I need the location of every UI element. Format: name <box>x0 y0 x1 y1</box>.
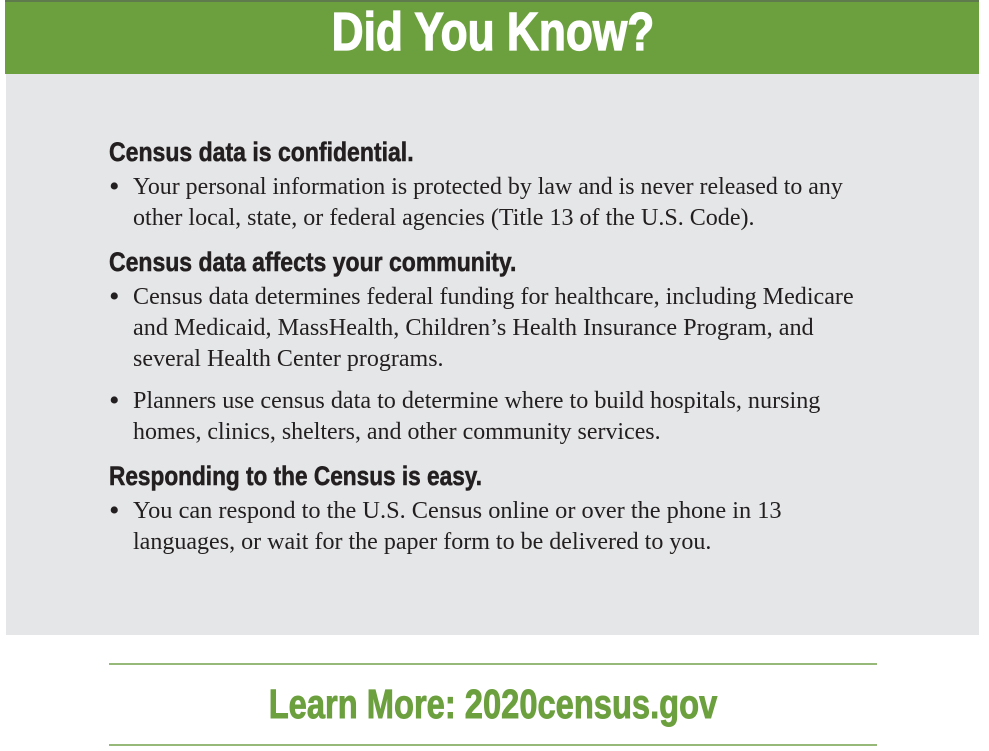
panel: facts <box>6 74 979 635</box>
heading: easy: Responding to the Census is easy. <box>109 460 482 490</box>
heading: confidential: Census data is confidential. <box>109 136 414 166</box>
bullet: • <box>109 384 120 417</box>
text: planners: Planners use census data to determine where to build hospitals, nursing <box>133 387 820 414</box>
bullet: • <box>109 494 120 527</box>
text: responding: languages, or wait for the paper form to be delivered to you. <box>133 528 711 555</box>
text: confidentiality: Your personal information is protected by law and is never released to any <box>133 173 843 200</box>
text: responding: You can respond to the U.S. Census online or over the phone in 13 <box>133 497 782 524</box>
bullet: • <box>109 280 120 313</box>
text: responding <box>133 497 782 555</box>
title: Did You Know? <box>332 2 654 62</box>
text: confidentiality <box>133 173 843 231</box>
text: funding: several Health Center programs. <box>133 345 444 372</box>
bullet: • <box>109 170 120 203</box>
footer link: Learn More: 2020census.gov <box>269 680 717 726</box>
text: funding: Census data determines federal funding for healthcare, including Medicare <box>133 283 854 310</box>
title banner <box>5 0 979 74</box>
heading: community: Census data affects your community. <box>109 246 516 276</box>
text: confidentiality: other local, state, or federal agencies (Title 13 of the U.S. Code). <box>133 204 755 231</box>
text: funding: and Medicaid, MassHealth, Children’s Health Insurance Program, and <box>133 314 814 341</box>
text: planners: homes, clinics, shelters, and other community services. <box>133 418 661 445</box>
text: funding <box>133 283 854 372</box>
text: planners <box>133 387 820 445</box>
